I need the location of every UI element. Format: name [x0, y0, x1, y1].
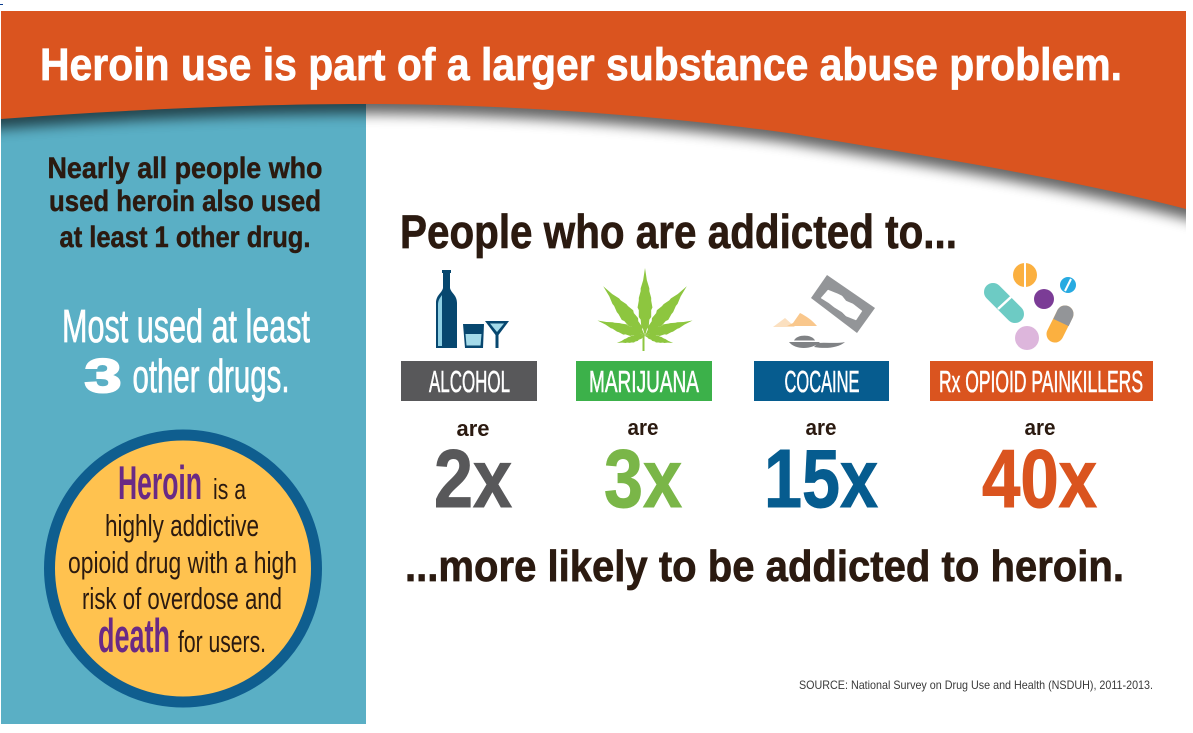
stat: marijuana 3x: are: [628, 415, 658, 440]
left panel text: nearly all: [48, 152, 322, 254]
source: SOURCE: National Survey on Drug Use and Health (NSDUH), 2011-2013.: [799, 678, 1153, 692]
stat: cocaine 15x: are: [806, 415, 836, 440]
header banner: [1, 11, 1186, 209]
stat: alcohol 2x: 2x: [434, 432, 512, 525]
callout circle: heroin definition: highly addictive: [105, 508, 259, 543]
label: alcohol: [401, 361, 537, 401]
left panel text: nearly all: at least 1 other drug.: [60, 221, 310, 254]
left panel text: most used: other drugs.: [132, 350, 290, 402]
conclusion text: ...more likely to be addicted to heroin.: [405, 542, 1124, 591]
icon: pills: [993, 263, 1076, 350]
left panel: [1, 100, 366, 724]
callout circle: heroin definition: is a: [213, 474, 247, 506]
callout circle: heroin definition: Heroin: [118, 456, 202, 509]
heading: people who are addicted: People who are addicted to...: [400, 205, 957, 258]
label: marijuana: [576, 361, 712, 401]
left panel text: nearly all: used heroin also used: [49, 185, 321, 218]
icon: cocaine razor, powder and spoon: [773, 275, 875, 348]
left panel text: most used: [62, 300, 310, 402]
icon: alcohol: [436, 270, 509, 348]
banner shadow: [1, 104, 1186, 229]
label: marijuana: MARIJUANA: [589, 364, 699, 399]
label: cocaine: [754, 361, 889, 401]
label: cocaine: COCAINE: [784, 364, 860, 399]
left panel text: most used: 3: [84, 349, 122, 402]
stat: marijuana 3x: 3x: [604, 432, 682, 525]
left panel text: nearly all: Nearly all people who: [48, 152, 322, 185]
stat: alcohol 2x: are: [456, 416, 490, 441]
callout circle: heroin definition: death: [98, 609, 170, 662]
icon: marijuana leaf: [596, 268, 694, 351]
callout circle: heroin definition: [50, 435, 316, 702]
callout circle: heroin definition: for users.: [178, 624, 266, 659]
callout circle: heroin definition: opioid drug with a high: [68, 545, 297, 580]
stat: painkillers 40x: 40x: [982, 432, 1097, 525]
label: alcohol: ALCOHOL: [429, 364, 510, 399]
left panel text: most used: Most used at least: [62, 300, 310, 352]
callout circle: heroin definition: risk of overdose and: [82, 581, 282, 616]
stat: painkillers 40x: are: [1024, 415, 1056, 440]
stat: cocaine 15x: 15x: [764, 432, 878, 525]
